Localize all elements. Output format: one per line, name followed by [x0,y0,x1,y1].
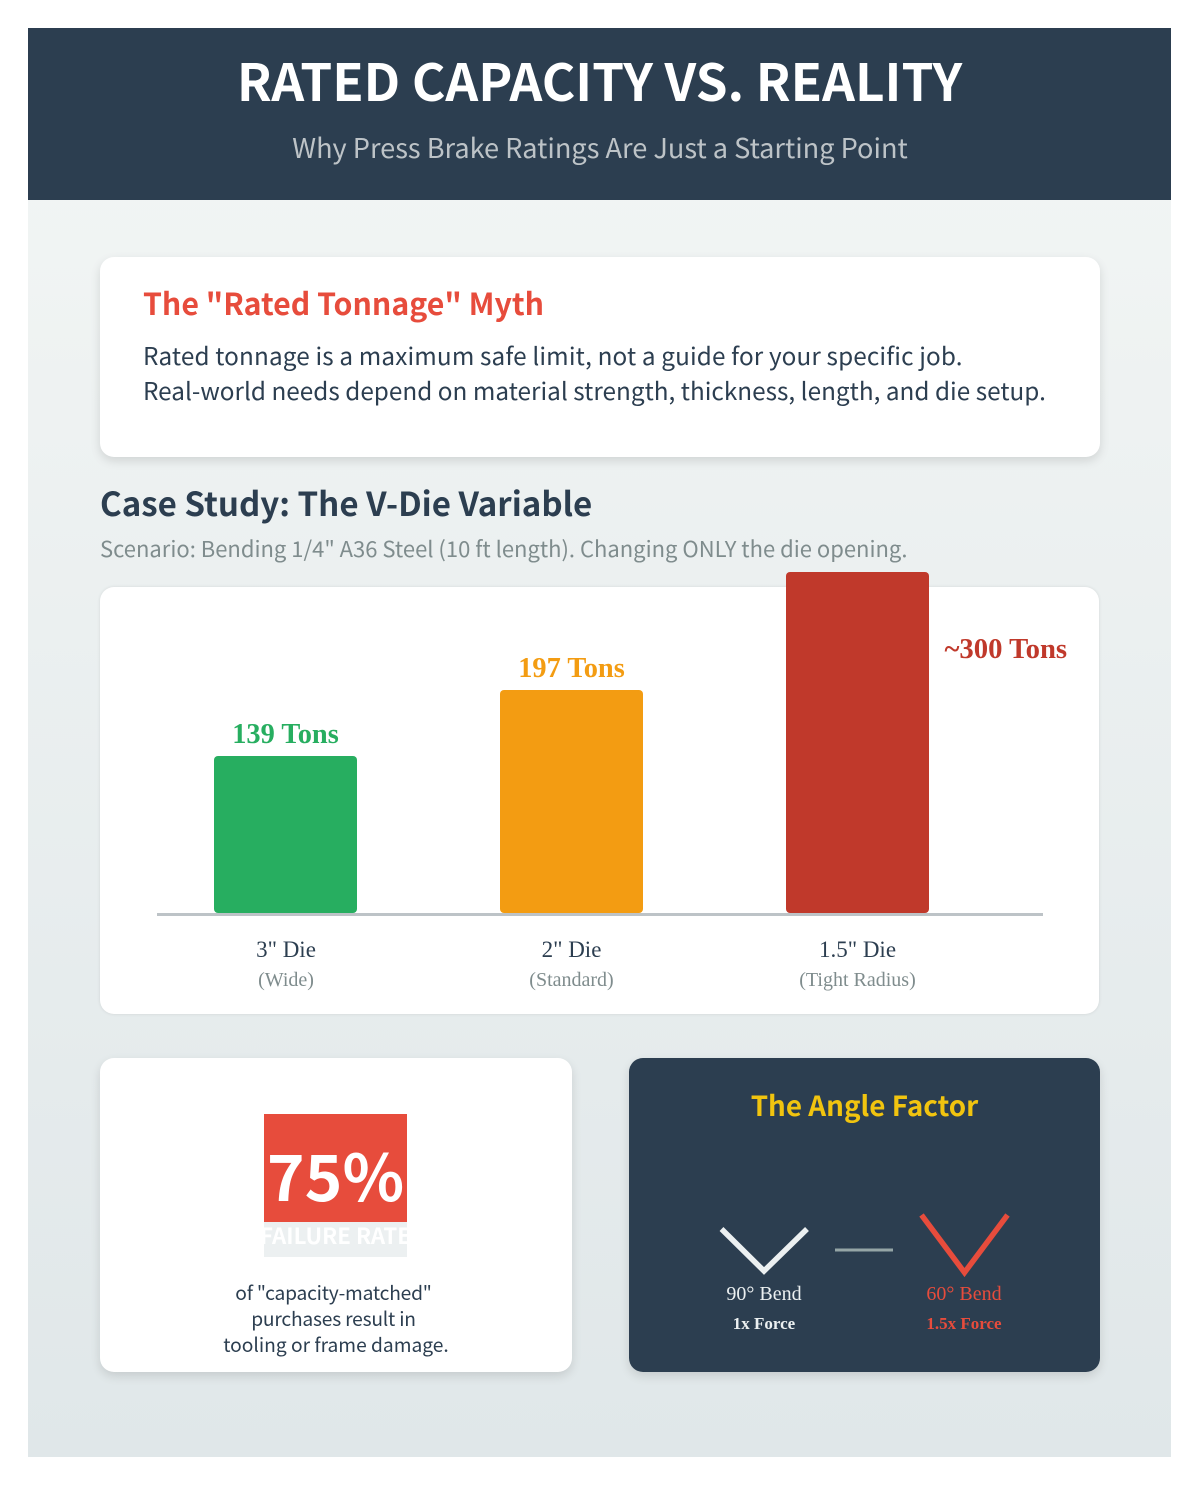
icon: 60 degree bend [922,1215,1008,1272]
sublabel: tight radius: (Tight Radius) [799,969,916,991]
title: RATED CAPACITY VS. REALITY [237,42,962,116]
label: 60 degree: 60° Bend [926,1283,1002,1305]
sublabel: standard: (Standard) [529,969,614,991]
label: 2 inch die: 2" Die [542,937,601,962]
case study scenario: Scenario: Bending 1/4" A36 Steel (10 ft length). Changing ONLY the die opening. [100,532,907,564]
value: 197 tons: 197 Tons [518,653,625,684]
case study heading: Case Study: The V-Die Variable [100,478,592,526]
myth text: Rated tonnage is a maximum safe limit, not a guide for your specific job. [143,337,963,372]
stat description: tooling or frame damage. [223,1330,449,1358]
label: 1.5 inch die: 1.5" Die [819,937,896,962]
header band [28,28,1171,200]
bar: 1.5 inch die [786,572,929,913]
subtitle: Why Press Brake Ratings Are Just a Starting Point [292,127,908,166]
myth heading: The "Rated Tonnage" Myth [143,280,544,324]
panel: failure rate [100,1058,572,1372]
bar chart [157,572,1067,991]
sublabel: wide: (Wide) [258,969,314,991]
force: 1x: 1x Force [733,1314,795,1333]
stat description: of "capacity-matched" [235,1278,432,1306]
icon: 90 degree bend [722,1229,807,1271]
angle factor heading: The Angle Factor [751,1085,978,1125]
axis line [157,913,1043,916]
bar: 3 inch die [214,756,357,913]
panel: angle factor [629,1058,1100,1372]
panel: bar chart [100,587,1099,1014]
stat: 75 percent: 75% [267,1128,404,1220]
panel: myth [100,257,1100,457]
stat description [223,1278,449,1358]
bar: 2 inch die [500,690,643,913]
force: 1.5x: 1.5x Force [926,1314,1002,1333]
value: 300 tons: ~300 Tons [944,633,1067,665]
stat box [264,1114,407,1257]
value: 139 tons: 139 Tons [232,719,339,750]
arrow: divider [835,1248,893,1252]
label: 90 degree: 90° Bend [726,1283,802,1305]
myth text: Real-world needs depend on material strength, thickness, length, and die setup. [143,372,1046,407]
angle diagrams [720,1213,1010,1277]
myth text [143,337,1046,407]
label: 3 inch die: 3" Die [256,937,316,962]
stat description: purchases result in [251,1304,416,1332]
